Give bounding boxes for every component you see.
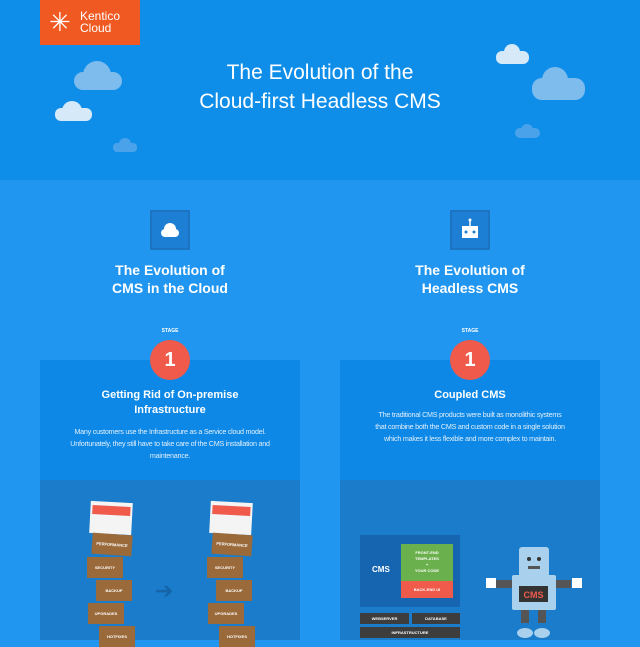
stack right — [207, 500, 255, 647]
stack right: HOTFIXES — [227, 634, 247, 639]
stage number: 1 — [164, 349, 176, 371]
stage heading: Infrastructure — [134, 404, 206, 416]
stack left: UPGRADES — [95, 611, 117, 616]
logo text — [80, 9, 120, 35]
stage heading: Getting Rid of On-premise — [102, 389, 238, 401]
heading: Headless CMS — [422, 280, 518, 296]
cms block: BACK-END UI — [414, 587, 440, 592]
stage number: 1 — [464, 349, 476, 371]
infrastructure: INFRASTRUCTURE — [392, 630, 428, 635]
heading — [415, 262, 525, 296]
title: Cloud-first Headless CMS — [199, 90, 441, 113]
robot: CMS — [524, 590, 544, 600]
cms block: FRONT-END — [415, 550, 439, 555]
column: headless evolution — [415, 210, 525, 296]
description: The traditional CMS products were built as monolithic systems that combine both the CMS and custom code in a single solution which makes it less flexible and more complex to maintain. — [375, 410, 565, 443]
logo — [40, 0, 140, 45]
stage label: STAGE — [162, 328, 178, 334]
stack right: PERFORMANCE — [216, 541, 248, 548]
logo text: Kentico — [80, 9, 120, 23]
cms block: CMS — [372, 565, 390, 574]
heading: The Evolution of — [415, 262, 525, 278]
stage heading — [102, 389, 238, 416]
stage number — [150, 340, 190, 380]
icon: sun logo: ✳ — [49, 7, 71, 37]
stack left: PERFORMANCE — [96, 541, 128, 548]
robot — [486, 547, 582, 638]
icon: robot — [450, 210, 490, 250]
webserver: WEBSERVER — [372, 616, 397, 621]
stack left: BACKUP — [105, 588, 123, 593]
stage label: STAGE — [462, 328, 478, 334]
webserver — [360, 613, 409, 624]
clouds — [55, 44, 585, 152]
cms block: TEMPLATES — [415, 556, 439, 561]
database: DATABASE — [425, 616, 447, 621]
heading: CMS in the Cloud — [112, 280, 228, 296]
logo text: Cloud — [80, 21, 111, 35]
cms block: + — [426, 562, 428, 567]
database — [412, 613, 460, 624]
illustration: box stacks — [40, 480, 300, 640]
column: cloud evolution — [112, 210, 228, 296]
cms block: YOUR CODE — [415, 568, 439, 573]
illustration: coupled cms diagram — [340, 480, 600, 640]
stage number — [450, 340, 490, 380]
stack left: SECURITY — [95, 565, 115, 570]
cms block — [360, 535, 460, 607]
stack right: BACKUP — [225, 588, 243, 593]
arrow: ➔ — [155, 578, 173, 603]
stage heading: Coupled CMS — [434, 389, 506, 401]
panel: stage 1 headless — [340, 328, 600, 640]
icon: cloud — [150, 210, 190, 250]
description: Many customers use the Infrastructure as a Service cloud model. Unfortunately, they still have to take care of the CMS installation and maintenance. — [70, 427, 270, 460]
stack left — [87, 500, 135, 647]
stack left: HOTFIXES — [107, 634, 127, 639]
header band — [0, 0, 640, 180]
heading: The Evolution of — [115, 262, 225, 278]
title — [199, 61, 441, 113]
heading — [112, 262, 228, 296]
stack right: UPGRADES — [215, 611, 237, 616]
stack right: SECURITY — [215, 565, 235, 570]
title: The Evolution of the — [227, 61, 413, 84]
infrastructure — [360, 627, 460, 638]
panel: stage 1 cloud — [40, 328, 300, 647]
